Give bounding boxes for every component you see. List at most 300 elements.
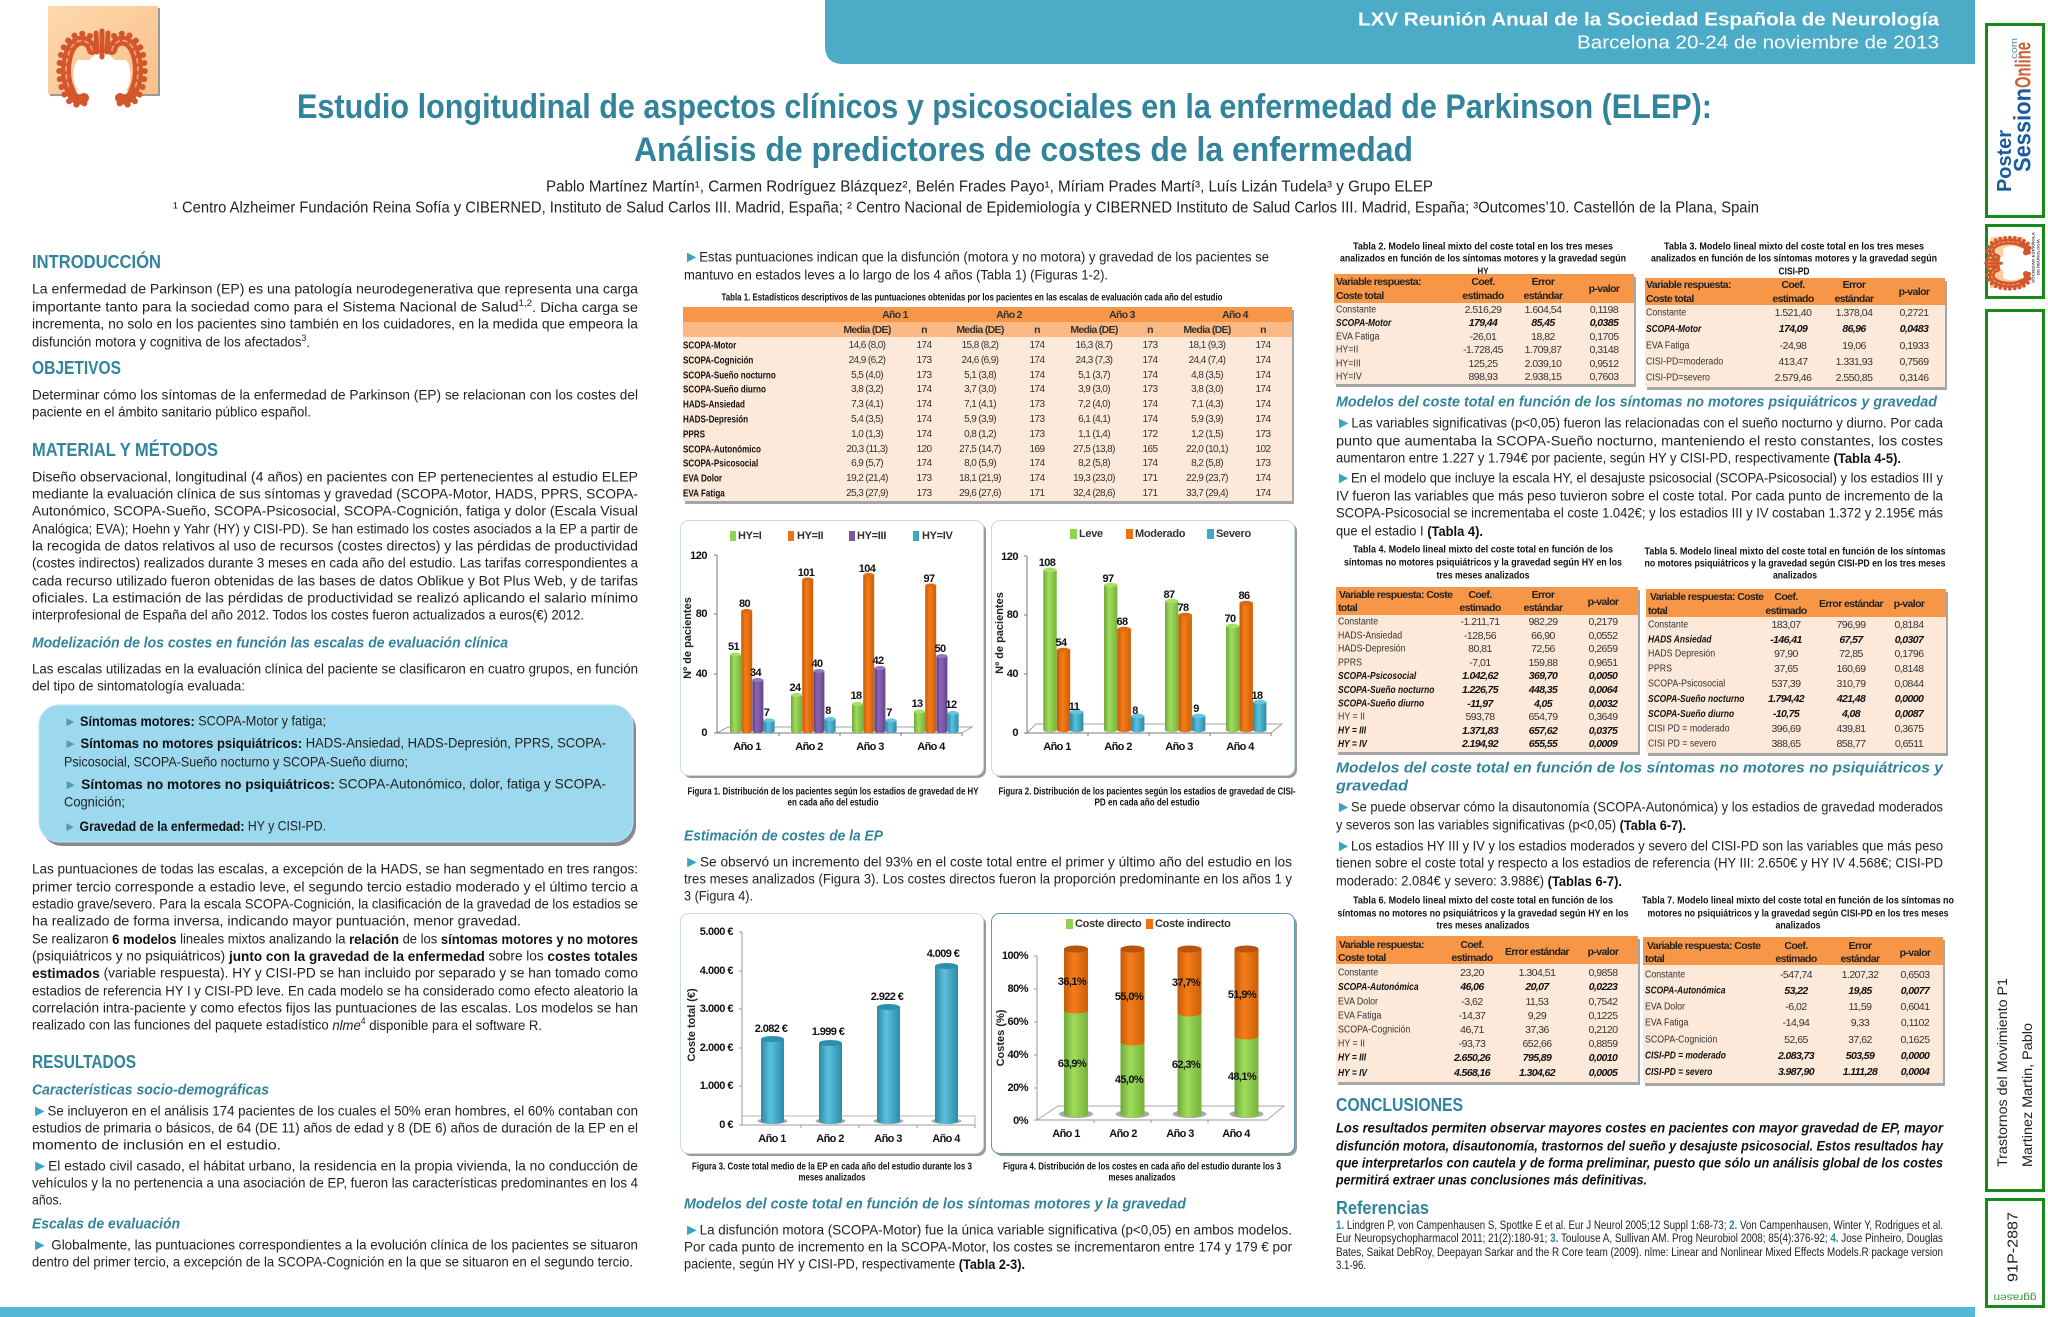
table 5: CISI PD = moderado — [1648, 723, 1730, 735]
text: puntuaciones: ha realizado de forma inversa, indicando mayor puntuación, menor gravedad. — [32, 914, 521, 928]
value labels: 55,0% — [1115, 991, 1144, 1003]
table 4: 369,70 — [1529, 670, 1558, 682]
callout: grupos de síntomas: ► Gravedad de la enfermedad: HY y CISI-PD. — [64, 818, 326, 834]
table 6: HY = IV — [1338, 1067, 1368, 1079]
table 6: Coste total — [1338, 952, 1386, 964]
table 2: 1.604,54 — [1525, 304, 1562, 316]
caption: tabla 6: síntomas no motores no psiquiátricos y la gravedad según HY en los — [1338, 908, 1629, 920]
text: introducción: 3 — [301, 333, 306, 343]
table 4: 0,2659 — [1588, 643, 1618, 655]
text: escalas — [32, 662, 638, 694]
table 2: 2.516,29 — [1465, 304, 1502, 316]
table 6: SCOPA-Autonómica — [1338, 981, 1419, 993]
title: Estudio longitudinal de aspectos clínicos y psicosociales en la enfermedad de Parkinson (ELEP): — [297, 88, 1712, 126]
table 1: 18,1 (9,3) — [1189, 340, 1226, 350]
text: modelos no psiquiátricos: tienen sobre el coste total y respecto a los estadios de referencia (HY III: 2.650€ y HY IV 4.568€; CISI-PD — [1336, 856, 1943, 870]
logo: brain — [48, 6, 160, 105]
bars — [1043, 568, 1266, 732]
table 6: 37,36 — [1525, 1024, 1550, 1036]
text: estimación de costes: ►Se observó un incremento del 93% en el coste total entre el primer y último año del estudio en los — [684, 854, 1292, 870]
subheading: escalas de evaluación: Escalas de evaluación — [32, 1216, 180, 1232]
chart: figura 3: Año 1 — [758, 1133, 786, 1145]
text: introducción: importante tanto para la sociedad como para el Sistema Nacional de Salud — [32, 300, 483, 314]
text: introducción: . Dicha carga se — [532, 300, 638, 314]
value labels: 80 — [739, 598, 750, 610]
caption: figura 3: meses analizados — [798, 1172, 866, 1184]
table 1: 22,0 (10,1) — [1186, 444, 1228, 454]
table 4 — [1336, 587, 1640, 755]
caption: tabla 5 — [1644, 546, 1946, 582]
table 2: -26,01 — [1470, 331, 1497, 343]
table 1: 4,8 (3,5) — [1191, 370, 1223, 380]
table 7: 37,62 — [1848, 1034, 1873, 1046]
chart: figura 1 — [680, 520, 986, 778]
table 3: CISI-PD=moderado — [1646, 356, 1723, 368]
table 1: 6,1 (4,1) — [1078, 414, 1110, 424]
table 3: 0,1933 — [1899, 340, 1929, 352]
chart: figura 4: Año 4 — [1222, 1128, 1251, 1140]
table 4: total — [1338, 602, 1358, 614]
table 4: SCOPA-Sueño diurno — [1338, 698, 1424, 710]
value labels: 8 — [1132, 705, 1138, 717]
text: estas puntuaciones — [684, 248, 1269, 282]
table 1: 120 — [917, 444, 932, 454]
table 3: 1.521,40 — [1775, 307, 1812, 319]
text: modelos psiquiátricos: que el estadio I (Tabla 4). — [1336, 524, 1483, 538]
table 5: 183,07 — [1771, 619, 1801, 631]
table 1: SCOPA-Psicosocial — [683, 458, 758, 468]
table 7: 0,0077 — [1901, 985, 1931, 997]
caption: tabla 7 — [1642, 896, 1954, 932]
caption: tabla 3: Tabla 3. Modelo lineal mixto del coste total en los tres meses — [1664, 242, 1924, 252]
text: características: estudios de primaria o básicos, de 64 (DE 11) años de edad y 8 (DE 6) años de duración de la EP en el — [32, 1120, 638, 1136]
table 1: 102 — [1256, 444, 1271, 454]
caption: tabla 7: analizados — [1776, 920, 1821, 932]
table 6: 46,06 — [1459, 981, 1484, 993]
table 1: 174 — [1143, 354, 1158, 366]
text: modelos no psiquiátricos: y severos son las variables significativas (p<0,05) (Tabla 6-7). — [1336, 818, 1686, 832]
table 2: HY=III — [1336, 358, 1361, 370]
table 4: 655,55 — [1529, 738, 1558, 750]
table 1: 14,6 (8,0) — [849, 340, 886, 350]
table 3: 2.579,46 — [1775, 372, 1812, 384]
table 3: estimado — [1772, 293, 1814, 305]
table 2: 0,9512 — [1589, 358, 1619, 370]
value labels: 9 — [1193, 703, 1199, 715]
table 3: 174,09 — [1779, 323, 1808, 335]
text: conclusiones: permitirá extraer unas conclusiones más definitivas. — [1335, 1172, 1647, 1188]
table 1: 174 — [1030, 354, 1045, 366]
table 1: SCOPA-Sueño nocturno — [683, 370, 776, 380]
text: modelos lineales: realizado con las funciones del paquete estadístico nlme — [32, 1018, 362, 1032]
table 6: 0,2120 — [1588, 1024, 1618, 1036]
table 1: 174 — [917, 340, 932, 350]
chart: figura 3: Año 2 — [816, 1133, 844, 1145]
sidebar: poster session logo: .com — [2009, 38, 2019, 62]
table 6 — [1336, 936, 1640, 1085]
table 1: 171 — [1143, 488, 1158, 498]
text: diseño: la recogida de datos relativos al uso de recursos (costes directos) y las pérdidas de productividad — [32, 538, 638, 554]
table 5: 0,1796 — [1894, 648, 1924, 660]
table 1: Media (DE) — [956, 324, 1004, 336]
header band — [825, 0, 1975, 64]
chart: figura 1: Año 4 — [917, 741, 946, 753]
table 4: HY = II — [1338, 711, 1365, 723]
table 6: EVA Fatiga — [1338, 1010, 1382, 1022]
table 6: 2.650,26 — [1453, 1052, 1491, 1064]
table 5: 0,8148 — [1894, 663, 1924, 675]
value labels: 7 — [886, 707, 892, 719]
title — [297, 88, 1712, 169]
authors: Pablo Martínez Martín¹, Carmen Rodríguez Blázquez², Belén Frades Payo¹, Míriam Prades Martí³, Luís Lizán Tudela³ y Grupo ELEP — [546, 178, 1433, 196]
chart: figura 1: Año 2 — [795, 741, 823, 753]
table 1: 172 — [1143, 428, 1158, 440]
table 2: Error — [1532, 276, 1555, 288]
value labels: 18 — [850, 690, 862, 702]
value labels: 40 — [811, 658, 823, 670]
text: puntuaciones: Las puntuaciones de todas las escalas, a excepción de la HADS, se han segmentado en tres rangos: — [32, 862, 638, 876]
text: diseño — [32, 470, 638, 622]
table 5: p-valor — [1894, 598, 1925, 610]
callout: grupos de síntomas: Psicosocial, SCOPA-Sueño nocturno y SCOPA-Sueño diurno; — [64, 754, 408, 770]
text: diseño: oficiales. La estimación de las pérdidas de productividad se realizó aplicando el salario mínimo — [32, 590, 638, 606]
value labels: 70 — [1224, 613, 1236, 625]
table 1: EVA Dolor — [683, 473, 722, 483]
table 1: 8,2 (5,8) — [1191, 458, 1223, 468]
table 7: Error — [1849, 940, 1872, 952]
table 1: 174 — [1143, 398, 1158, 410]
table 3: 0,7569 — [1899, 356, 1929, 368]
text: modelos psiquiátricos — [1336, 414, 1943, 538]
sidebar: poster session logo: Online — [2010, 42, 2036, 88]
table 4: estimado — [1459, 602, 1501, 614]
text: escalas: del tipo de sintomatología evaluada: — [32, 678, 245, 694]
table 1: n — [1260, 324, 1266, 336]
table 1: 7,1 (4,3) — [1191, 398, 1223, 410]
text: diseño: Diseño observacional, longitudinal (4 años) en pacientes con EP pertenecientes al estudio ELEP — [32, 470, 638, 484]
text: características: ►Se incluyeron en el análisis 174 pacientes de los cuales el 50% eran hombres, el 60% contaban con — [32, 1102, 638, 1120]
sidebar: topic and author: Martinez Martin, Pablo — [2019, 1023, 2035, 1167]
table 1: Año 4 — [1222, 309, 1249, 321]
heading: objetivos: OBJETIVOS — [32, 358, 121, 378]
chart: figura 2: 120 — [1001, 551, 1018, 563]
table 5: 421,48 — [1836, 693, 1866, 705]
table 7: 0,1625 — [1900, 1034, 1930, 1046]
table 7: 0,0004 — [1901, 1066, 1930, 1078]
conference name: LXV Reunión Anual de la Sociedad Española de Neurología — [1358, 8, 1940, 30]
legend: HY=III — [857, 530, 886, 542]
text: modelos lineales: 4 — [361, 1016, 366, 1026]
heading: introducción: INTRODUCCIÓN — [32, 251, 161, 272]
table 7: 0,0000 — [1901, 1050, 1930, 1062]
sidebar: small logo: DE NEUROLOGÍA — [2036, 239, 2040, 275]
table 4: estándar — [1524, 602, 1563, 614]
table 6: 795,89 — [1523, 1052, 1552, 1064]
table 6: -93,73 — [1459, 1038, 1486, 1050]
table 6: 11,53 — [1526, 996, 1549, 1008]
value labels: 48,1% — [1228, 1071, 1257, 1083]
legend: Coste directo — [1075, 918, 1142, 930]
table 6: 0,0005 — [1589, 1067, 1618, 1079]
table 7: -547,74 — [1780, 969, 1813, 981]
chart: figura 2: Año 1 — [1043, 741, 1071, 753]
text: diseño: Autonómico, SCOPA-Sueño, SCOPA-Psicosocial, SCOPA-Cognición, fatiga y dolor (Escala Visual — [32, 504, 638, 518]
table 3: 0,2721 — [1899, 307, 1929, 319]
caption: tabla 7: motores no psiquiátricos y la gravedad según CISI-PD en los tres meses — [1648, 908, 1949, 920]
chart: figura 1: Nº de pacientes — [682, 597, 694, 679]
table 4: HADS-Ansiedad — [1338, 630, 1402, 642]
table 2: 0,1198 — [1590, 304, 1619, 316]
table 1: 1,2 (1,5) — [1191, 428, 1223, 440]
value labels: 54 — [1055, 637, 1068, 649]
table 4: 593,78 — [1465, 711, 1495, 723]
sidebar: small logo — [1986, 226, 2044, 298]
table 1: Año 2 — [996, 309, 1023, 321]
chart: figura 3: 5.000 € — [700, 926, 733, 938]
table 5: 396,69 — [1771, 723, 1801, 735]
callout: grupos de síntomas: Cognición; — [64, 794, 125, 810]
table 5: 4,08 — [1841, 708, 1861, 720]
table 2: HY=II — [1336, 344, 1358, 356]
caption: tabla 3 — [1651, 242, 1937, 278]
table 5: 67,57 — [1839, 634, 1864, 646]
table 3: Error — [1843, 279, 1866, 291]
text: modelos psiquiátricos: aumentaron entre 1.227 y 1.794€ por paciente, según HY y CISI-PD, respectivamente (Tabla 4-5). — [1336, 450, 1901, 466]
callout: grupos de síntomas: ► Síntomas no motores psiquiátricos: HADS-Ansiedad, HADS-Depresión, PPRS, SCOPA- — [64, 736, 606, 750]
chart: figura 3: Coste total (€) — [686, 988, 698, 1062]
table 2: 0,3148 — [1589, 344, 1619, 356]
value labels: 18 — [1251, 690, 1263, 702]
text: referencias — [1336, 1220, 1943, 1272]
table 3: 0,3146 — [1899, 372, 1929, 384]
text: introducción — [32, 282, 638, 350]
value labels: 42 — [872, 655, 884, 667]
table 1: 16,3 (8,7) — [1076, 340, 1113, 350]
text: referencias: Eur Neuropsychopharmacol 2011; 21(2):180-91; 3. Toulouse A, Sullivan AM. Prog Neurobiol 2008; 85(4):376-92; 4. Jose Pinheiro, Douglas — [1336, 1233, 1943, 1245]
caption: tabla 4 — [1344, 544, 1622, 582]
table 7: -14,94 — [1783, 1017, 1810, 1029]
subheading: características: Características socio-demográficas — [32, 1082, 269, 1098]
table 4: 0,0009 — [1589, 738, 1618, 750]
table 1: 174 — [1030, 472, 1045, 484]
table 1: 174 — [1256, 384, 1271, 394]
value labels: 68 — [1116, 616, 1128, 628]
text: estas puntuaciones: ►Estas puntuaciones indican que la disfunción (motora y no motora) y gravedad de los pacientes se — [684, 248, 1269, 266]
table 6: 0,1225 — [1588, 1010, 1618, 1022]
value labels: 4.009 € — [927, 948, 960, 960]
table 3: 1.331,93 — [1836, 356, 1873, 368]
table 3: 86,96 — [1842, 323, 1866, 335]
text: conclusiones: disfunción motora, disautonomía, trastornos del sueño y desajuste psicosocial. Estos resultados hay — [1336, 1138, 1944, 1154]
caption: figura 4 — [1003, 1162, 1281, 1184]
text: referencias: 3.1-96. — [1336, 1260, 1366, 1272]
table 5: 439,81 — [1836, 723, 1866, 735]
table 1: 173 — [917, 354, 932, 366]
caption: tabla 7: Tabla 7. Modelo lineal mixto del coste total en función de los síntomas no — [1642, 896, 1954, 906]
table 1: 174 — [1256, 488, 1271, 498]
table 1: 174 — [1256, 414, 1271, 424]
text: estas puntuaciones: mantuvo en estados leves a lo largo de los 4 años (Tabla 1) (Figuras 1-2). — [684, 268, 1108, 282]
table 6: 4.568,16 — [1453, 1067, 1491, 1079]
table 2: 2.039,10 — [1525, 358, 1562, 370]
callout: grupos de síntomas: ► Síntomas no motores no psiquiátricos: SCOPA-Autonómico, dolor, fatiga y SCOPA- — [64, 776, 606, 792]
table 4: 66,90 — [1531, 630, 1556, 642]
table 2 — [1334, 274, 1636, 387]
table 7: CISI-PD = moderado — [1645, 1050, 1726, 1062]
table 2: EVA Fatiga — [1336, 331, 1380, 343]
table 1: 173 — [917, 472, 932, 484]
table 2: estándar — [1524, 290, 1563, 302]
table 1: 174 — [1143, 458, 1158, 468]
text: diseño: interprofesional de España del año 2012. Todos los costes fueron actualizados a euros(€) 2012. — [32, 608, 584, 622]
table 3: EVA Fatiga — [1646, 340, 1690, 352]
table 3: p-valor — [1899, 286, 1930, 298]
table 1: 25,3 (27,9) — [846, 488, 888, 498]
subheading: estimación de costes: Estimación de costes de la EP — [684, 828, 884, 844]
table 4: 0,0064 — [1589, 684, 1618, 696]
caption: tabla 2: analizados en función de los síntomas motores y la gravedad según — [1340, 254, 1626, 264]
heading: referencias: Referencias — [1336, 1198, 1429, 1218]
chart: figura 4: Costes (%) — [995, 1009, 1007, 1066]
table 1: 8,0 (5,9) — [964, 458, 996, 468]
table 5: 0,0000 — [1895, 693, 1924, 705]
value labels: 97 — [923, 573, 935, 585]
table 4: -11,97 — [1467, 698, 1494, 710]
chart: figura 1: 80 — [696, 608, 707, 620]
table 3: Variable respuesta: — [1646, 279, 1731, 291]
table 1: 173 — [1030, 398, 1045, 410]
table 2: estimado — [1462, 290, 1504, 302]
table 7: SCOPA-Autonómica — [1645, 985, 1726, 997]
table 5: 0,0844 — [1894, 678, 1924, 690]
table 6: Coef. — [1460, 939, 1484, 951]
table 2: 85,45 — [1531, 317, 1555, 329]
callout: grupos de síntomas — [39, 705, 636, 846]
table 7: 11,59 — [1848, 1001, 1872, 1013]
table 1: 174 — [1030, 370, 1045, 380]
table 1: SCOPA-Sueño diurno — [683, 384, 766, 394]
table 1: 6,9 (5,7) — [851, 458, 883, 468]
table 7: 1.111,28 — [1843, 1066, 1878, 1078]
text: escalas: Las escalas utilizadas en la evaluación clínica del paciente se clasificaron en cuatro grupos, en función — [32, 662, 638, 676]
chart: figura 1: 120 — [690, 550, 707, 562]
table 5: 796,99 — [1836, 619, 1866, 631]
text: conclusiones: que interpretarlos con cautela y de forma preliminar, puesto que sólo un análisis global de los costes — [1336, 1156, 1943, 1170]
sidebar: poster session logo: Session — [2010, 88, 2036, 172]
table 6: 0,0010 — [1589, 1052, 1618, 1064]
table 1: 24,6 (6,9) — [962, 354, 999, 366]
table 1: 169 — [1030, 444, 1045, 454]
table 4: 2.194,92 — [1461, 738, 1499, 750]
table 4: 0,0050 — [1589, 670, 1618, 682]
value labels: 1.999 € — [812, 1026, 845, 1038]
table 4: SCOPA-Psicosocial — [1338, 670, 1417, 682]
caption: figura 4: meses analizados — [1108, 1172, 1176, 1184]
caption: tabla 5: Tabla 5. Modelo lineal mixto del coste total en función de los síntomas — [1644, 546, 1946, 558]
caption: tabla 6: Tabla 6. Modelo lineal mixto del coste total en función de los — [1353, 896, 1613, 906]
text: introducción: disfunción motora y cognitiva de los afectados — [32, 334, 310, 350]
chart: figura 3: 3.000 € — [700, 1003, 733, 1015]
text: modelos motores: ►La disfunción motora (SCOPA-Motor) fue la única variable significativa (p<0,05) en ambos modelos. — [684, 1222, 1292, 1238]
table 7: 0,6041 — [1900, 1001, 1930, 1013]
text: referencias: 1. Lindgren P, von Campenhausen S, Spottke E et al. Eur J Neurol 2005;12 Suppl 1:68-73; 2. Von Campenhausen, Winter Y, Rodrigues et al. — [1336, 1220, 1943, 1232]
table 4: 0,0375 — [1589, 725, 1618, 737]
text: características: vehículos y la no pertenencia a una asociación de EP, fueron las características predominantes en los 4 — [32, 1176, 638, 1190]
table 3: CISI-PD=severo — [1646, 372, 1710, 384]
table 2: 0,1705 — [1589, 331, 1619, 343]
subheading: modelos motores: Modelos del coste total en función de los síntomas motores y la gravedad — [684, 1196, 1187, 1212]
text: referencias: Bates, Saikat DebRoy, Deepayan Sarkar and the R Core team (2009). nlme: Linear and Nonlinear Mixed Effects Models.R package version — [1336, 1247, 1943, 1259]
callout: grupos de síntomas: ► Síntomas motores: SCOPA-Motor y fatiga; — [64, 714, 326, 728]
value labels — [728, 563, 957, 719]
table 4: -128,56 — [1464, 630, 1497, 642]
value labels: 108 — [1039, 557, 1056, 569]
table 6: Constante — [1338, 967, 1378, 979]
table 6: 1.304,62 — [1519, 1067, 1556, 1079]
table 4: 0,2179 — [1588, 616, 1618, 628]
chart: figura 4: Año 2 — [1109, 1128, 1137, 1140]
text: estimación de costes: 3 (Figura 4). — [684, 888, 753, 904]
table 2: Coef. — [1471, 276, 1495, 288]
stacked bars — [1059, 946, 1264, 1118]
chart: figura 3: Año 4 — [932, 1133, 961, 1145]
caption: tabla 2: Tabla 2. Modelo lineal mixto del coste total en los tres meses — [1353, 242, 1613, 252]
text: modelos psiquiátricos: ►Las variables significativas (p<0,05) fueron las relacionadas con el sueño nocturno y diurno. Por cada — [1336, 414, 1943, 432]
caption: tabla 5: analizados — [1773, 570, 1817, 582]
heading: conclusiones: CONCLUSIONES — [1336, 1095, 1463, 1115]
table 5: 0,0307 — [1895, 634, 1925, 646]
chart: figura 3: 4.000 € — [700, 965, 733, 977]
chart: figura 4: 100% — [1002, 950, 1029, 962]
table 5: SCOPA-Psicosocial — [1648, 678, 1725, 690]
subheading: modelización: Modelización de los costes en función las escalas de evaluación clínica — [32, 634, 508, 652]
table 3: Constante — [1646, 307, 1686, 319]
chart: figura 2: 40 — [1007, 668, 1018, 680]
table 6: p-valor — [1588, 946, 1619, 958]
value labels: 63,9% — [1058, 1058, 1087, 1070]
table 4: SCOPA-Sueño nocturno — [1338, 684, 1435, 696]
value labels: 2.082 € — [755, 1023, 788, 1035]
legend — [730, 530, 954, 542]
value labels: 51 — [728, 641, 739, 653]
table 1: 32,4 (28,6) — [1073, 488, 1115, 498]
table 1: 173 — [917, 488, 932, 498]
text: introducción: . — [306, 334, 310, 350]
table 5: Error estándar — [1819, 598, 1883, 610]
table 6: estimado — [1451, 952, 1493, 964]
bars — [758, 963, 962, 1124]
value labels: 51,9% — [1228, 989, 1257, 1001]
table 1: 174 — [1256, 398, 1271, 410]
chart: figura 3: 1.000 € — [700, 1080, 733, 1092]
legend: HY=IV — [922, 530, 954, 542]
text: modelos no psiquiátricos — [1336, 798, 1943, 888]
table 5: 537,39 — [1771, 678, 1801, 690]
table 6: 1.304,51 — [1519, 967, 1556, 979]
table 5: 858,77 — [1836, 738, 1866, 750]
table 4: -1.211,71 — [1460, 616, 1500, 628]
table 1: 5,4 (3,5) — [851, 414, 883, 424]
table 6: HY = II — [1338, 1038, 1365, 1050]
table 1: HADS-Depresión — [683, 414, 748, 424]
table 7: 503,59 — [1846, 1050, 1875, 1062]
table 5: PPRS — [1648, 663, 1672, 675]
table 1: 174 — [917, 398, 932, 410]
text: diseño: Analógica; EVA); Hoehn y Yahr (HY) y CISI-PD). Se han estimado los costes asociados a la EP a partir de — [32, 522, 638, 536]
value labels: 86 — [1238, 590, 1250, 602]
text: introducción: 1,2 — [519, 298, 532, 308]
table 1: Año 3 — [1109, 309, 1136, 321]
